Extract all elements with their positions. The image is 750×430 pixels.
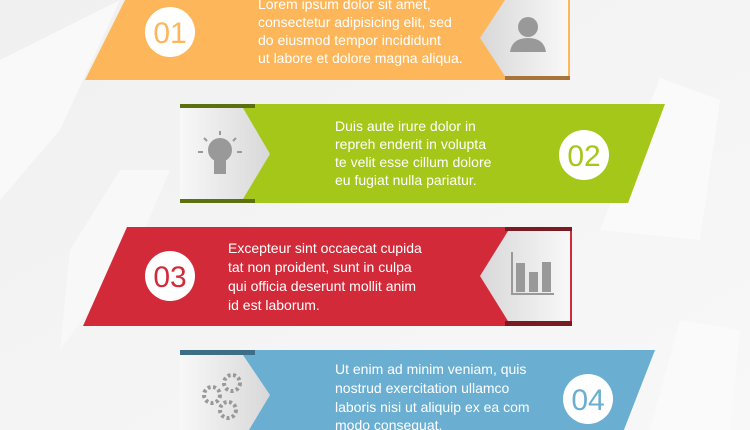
text 02: Duis aute irure dolor in: [335, 118, 476, 134]
number 01: 01: [153, 17, 187, 50]
text 03: qui officia deserunt mollit anim: [228, 278, 416, 294]
text 03: id est laborum.: [228, 297, 320, 313]
band 1 orange: [85, 0, 570, 80]
text 01: consectetur adipisicing elit, sed: [258, 14, 452, 30]
text 01: do eiusmod tempor incididunt: [258, 32, 441, 48]
number 04: 04: [571, 384, 605, 417]
number 04: [563, 374, 613, 424]
band 4 blue: [180, 350, 655, 430]
text 04: laboris nisi ut aliquip ex ea com: [335, 399, 530, 415]
icon panel: gears: [180, 355, 270, 430]
number 02: 02: [567, 140, 601, 173]
icon panel: chart: [480, 227, 572, 326]
number 01: [145, 7, 195, 57]
band 2 green: [180, 104, 665, 203]
text 03: Excepteur sint occaecat cupida: [228, 240, 422, 256]
band 3 red: [83, 227, 572, 326]
number 03: 03: [153, 261, 187, 294]
text 04: Ut enim ad minim veniam, quis: [335, 361, 526, 377]
icon panel: bulb: [180, 108, 270, 199]
text 04: nostrud exercitation ullamco: [335, 380, 510, 396]
icon panel: person: [480, 0, 570, 80]
number 03: [145, 251, 195, 301]
text 01: ut labore et dolore magna aliqua.: [258, 50, 463, 66]
text 02: eu fugiat nulla pariatur.: [335, 172, 477, 188]
number 02: [559, 130, 609, 180]
text 03: tat non proident, sunt in culpa: [228, 259, 412, 275]
text 02: te velit esse cillum dolore: [335, 154, 492, 170]
text 02: repreh enderit in volupta: [335, 136, 486, 152]
